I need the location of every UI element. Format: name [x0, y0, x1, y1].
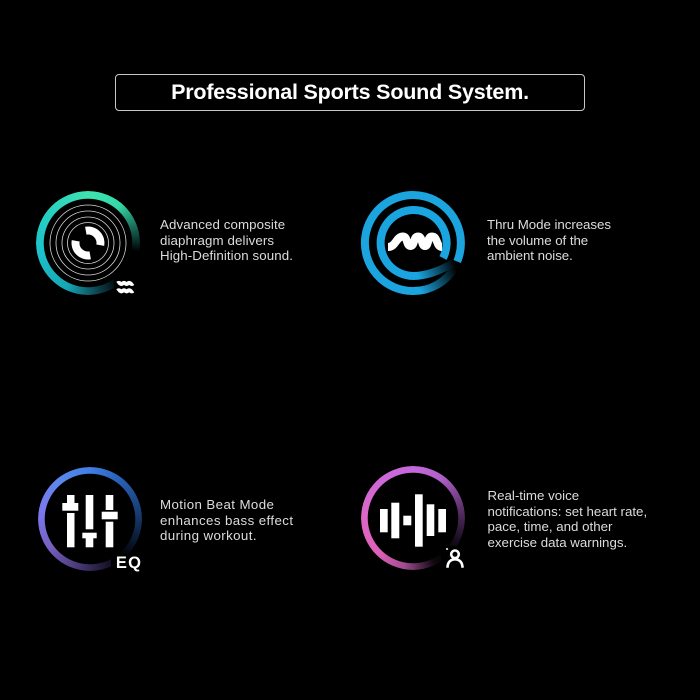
- sound wave mark: [388, 232, 442, 251]
- text: diaphragm: [160, 217, 293, 263]
- voice ring: [361, 466, 465, 570]
- text: voice notifications: Real-time voice: [488, 488, 579, 503]
- icon: thru mode spiral: [360, 191, 465, 295]
- text: thru mode: [487, 217, 611, 263]
- title: [115, 74, 585, 111]
- EQ label: [111, 554, 147, 574]
- icon: diaphragm disc: [36, 191, 140, 295]
- text: diaphragm: Advanced composite: [160, 217, 285, 232]
- text: voice notifications: exercise data warnings.: [488, 535, 627, 550]
- text: voice notifications: [488, 488, 647, 550]
- equalizer sliders: [62, 495, 118, 548]
- icon: voice notifications: [361, 466, 465, 570]
- disc outer ring: [36, 191, 140, 295]
- text: diaphragm: diaphragm delivers: [160, 233, 274, 248]
- water waves badge: [114, 278, 134, 294]
- equalizer ring: [38, 467, 142, 571]
- text: thru mode: the volume of the: [487, 233, 588, 248]
- text: motion beat: Motion Beat Mode: [160, 497, 274, 512]
- text: voice notifications: notifications: set heart rate,: [488, 504, 647, 519]
- EQ label: EQ: [116, 554, 142, 572]
- text: voice notifications: pace, time, and other: [488, 519, 612, 534]
- text: motion beat: enhances bass effect: [160, 513, 293, 528]
- text: motion beat: [160, 497, 293, 543]
- text: thru mode: Thru Mode increases: [487, 217, 611, 232]
- person badge: [441, 546, 464, 568]
- disc concentric circles and centre mark: [50, 204, 126, 282]
- text: diaphragm: High-Definition sound.: [160, 248, 293, 263]
- text: thru mode: ambient noise.: [487, 248, 573, 263]
- text: motion beat: during workout.: [160, 528, 257, 543]
- voice bars: [380, 494, 446, 547]
- spiral rings: [360, 191, 465, 295]
- icon: equalizer: [38, 467, 142, 572]
- title: Professional Sports Sound System.: [171, 80, 529, 104]
